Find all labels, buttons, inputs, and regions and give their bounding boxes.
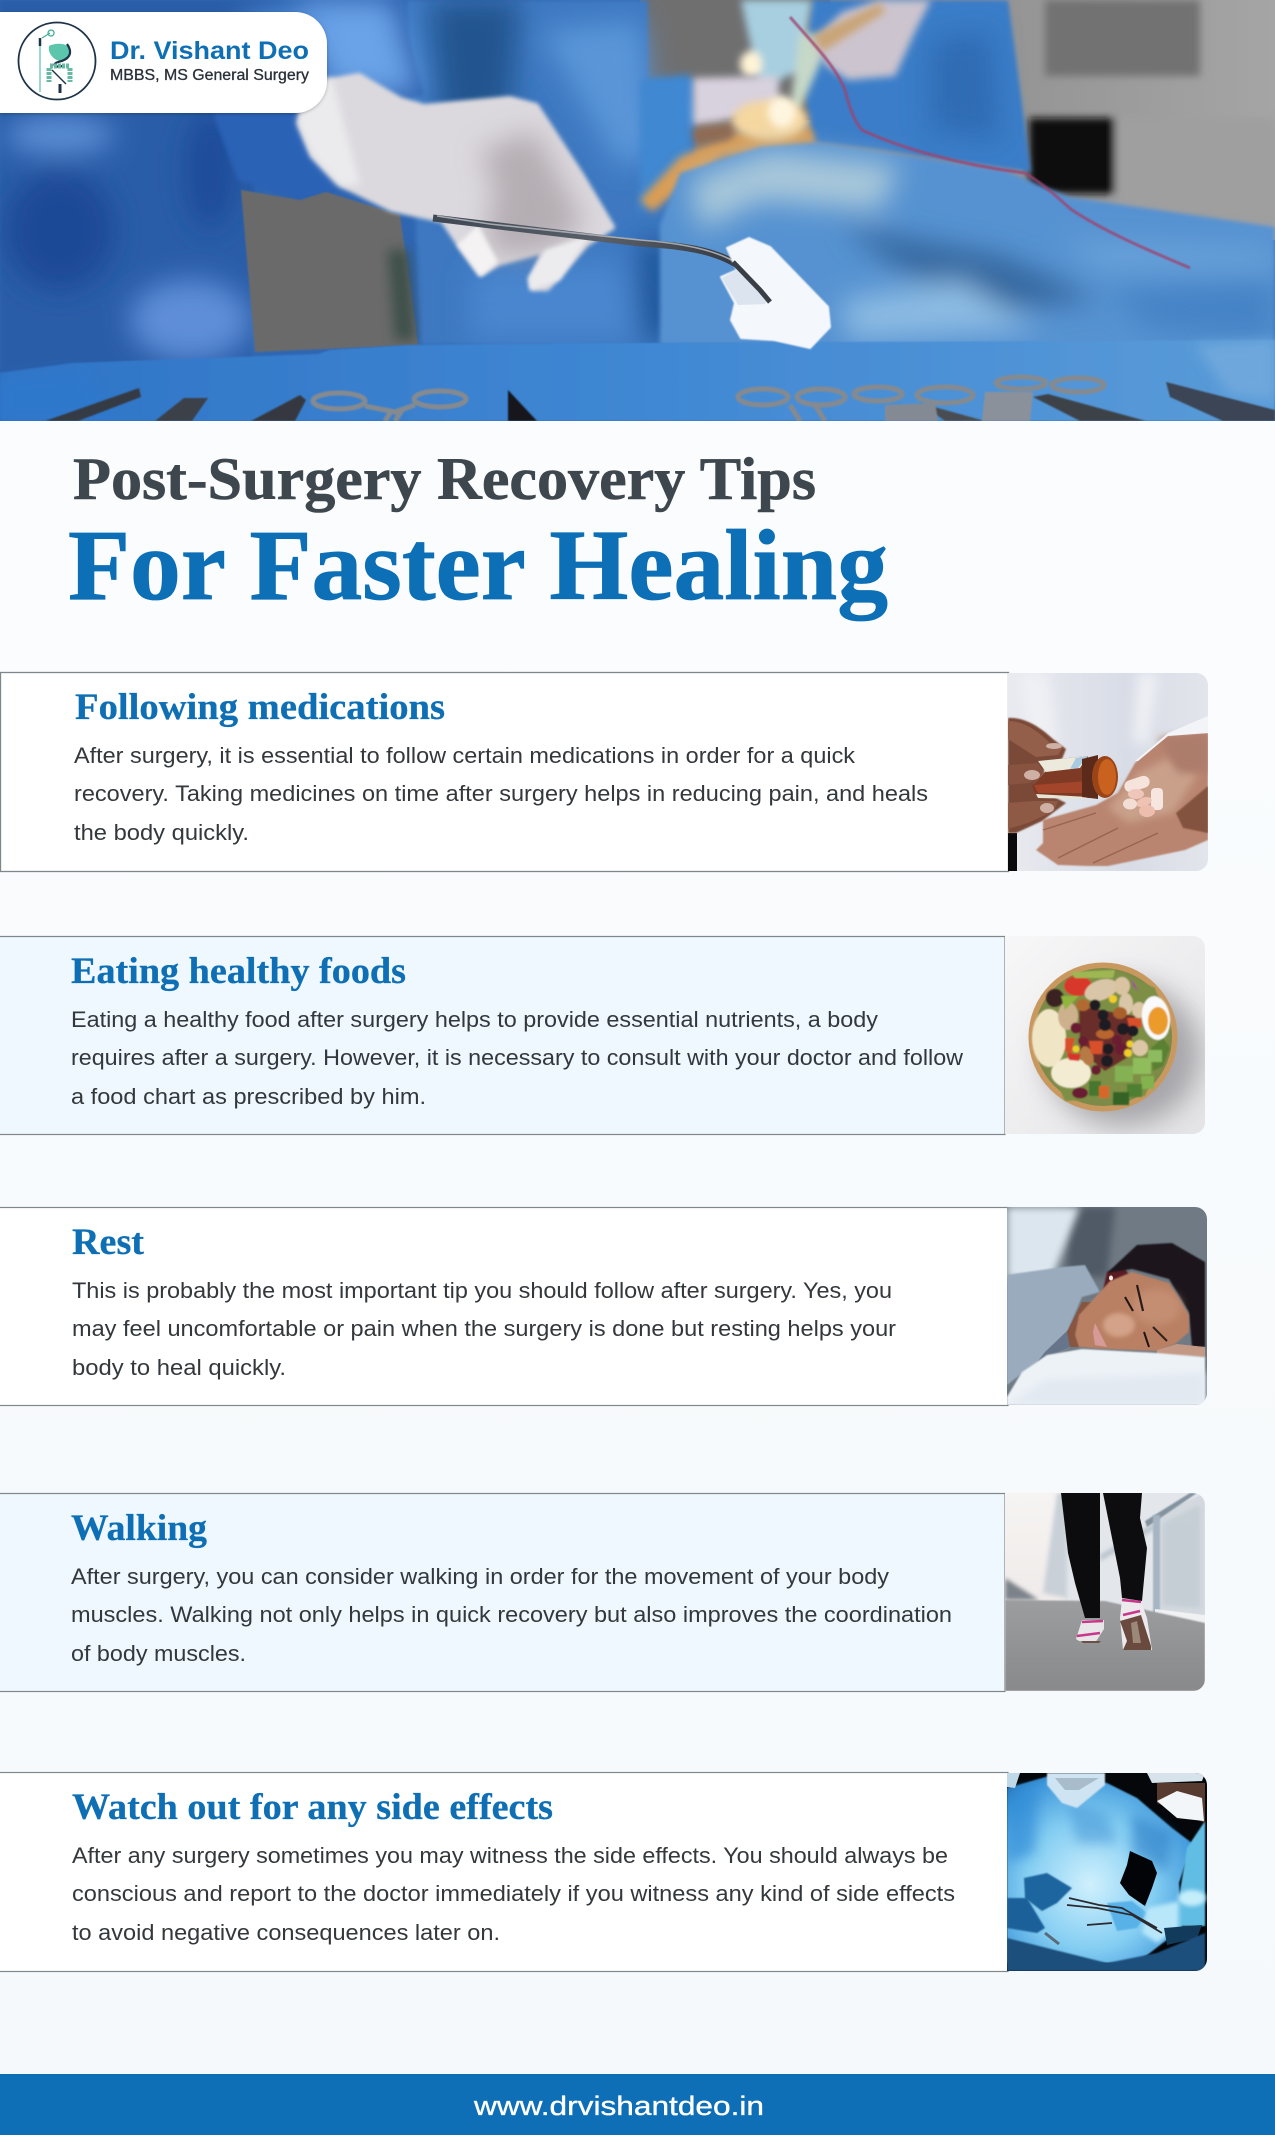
body text: After surgery, it is essential to follow certain medications in order for a quick (74, 743, 856, 768)
logo badge (0, 12, 327, 113)
body text: may feel uncomfortable or pain when the surgery is done but resting helps your (72, 1316, 897, 1341)
gauze (721, 238, 830, 348)
instruments on table (313, 377, 1104, 421)
body text: conscious and report to the doctor immediately if you witness any kind of side effects (72, 1881, 955, 1906)
panel: following medications (0, 672, 1208, 872)
photo: surgeons under blue light (1007, 1773, 1207, 1971)
photo: pills in palm (1008, 673, 1208, 871)
forceps (432, 214, 735, 268)
icon: digestive system logo (18, 22, 96, 100)
hero photo: surgeon holding gauze with forceps (0, 0, 1275, 421)
heading: Walking (71, 1508, 207, 1549)
body text: the body quickly. (74, 820, 249, 845)
heading: Rest (72, 1222, 145, 1263)
red tube (790, 17, 1190, 268)
body text: a food chart as prescribed by him. (71, 1084, 426, 1109)
table drape (0, 340, 1275, 421)
heading: Eating healthy foods (71, 951, 406, 992)
photo: walking legs (1005, 1493, 1205, 1691)
body text: of body muscles. (71, 1641, 246, 1666)
body text: recovery. Taking medicines on time after surgery helps in reducing pain, and heals (74, 781, 928, 806)
wall gap (241, 190, 418, 352)
heading: Following medications (75, 687, 445, 728)
patient body (640, 128, 816, 212)
tubes and glare (740, 0, 830, 110)
title line 1: Post-Surgery Recovery Tips (73, 446, 816, 512)
background hands (693, 76, 780, 125)
palm (1036, 733, 1208, 866)
panel: rest (0, 1207, 1207, 1406)
logo name: Dr. Vishant Deo (110, 37, 309, 65)
title line 2: For Faster Healing (68, 509, 888, 621)
body text (72, 1278, 897, 1380)
footer bar with website (0, 2074, 1275, 2135)
sleeve (1135, 716, 1208, 761)
left hand (1008, 718, 1066, 833)
body text: This is probably the most important tip you should follow after surgery. Yes, you (72, 1278, 892, 1303)
background surgeon sleeve (640, 74, 695, 215)
panel: watch out for side effects (0, 1772, 1207, 1972)
patient drape (660, 143, 1275, 345)
panel: eating healthy foods (0, 936, 1205, 1134)
center gown (408, 0, 695, 345)
photo: woman sleeping (1007, 1207, 1207, 1405)
body text: Eating a healthy food after surgery helps to provide essential nutrients, a body (71, 1007, 879, 1032)
body text: to avoid negative consequences later on. (72, 1920, 500, 1945)
body text: After surgery, you can consider walking in order for the movement of your body (71, 1564, 890, 1589)
body text (71, 1007, 964, 1109)
body text (71, 1564, 952, 1666)
body text: body to heal quickly. (72, 1355, 286, 1380)
body text: After any surgery sometimes you may witness the side effects. You should always be (72, 1843, 948, 1868)
rear gown (802, 0, 1031, 172)
right wall (640, 0, 1275, 240)
body text: requires after a surgery. However, it is necessary to consult with your doctor and follow (71, 1045, 964, 1070)
body text: muscles. Walking not only helps in quick recovery but also improves the coordination (71, 1602, 952, 1627)
website url: www.drvishantdeo.in (473, 2091, 764, 2121)
bottle (1032, 756, 1090, 798)
panel: walking (0, 1493, 1205, 1692)
pills (1123, 774, 1163, 817)
photo: salad bowl (1005, 936, 1205, 1134)
body text (74, 743, 928, 845)
heading: Watch out for any side effects (72, 1787, 553, 1828)
body text (72, 1843, 955, 1945)
logo credentials: MBBS, MS General Surgery (110, 67, 309, 84)
glove (300, 76, 612, 288)
left gown (0, 0, 424, 375)
